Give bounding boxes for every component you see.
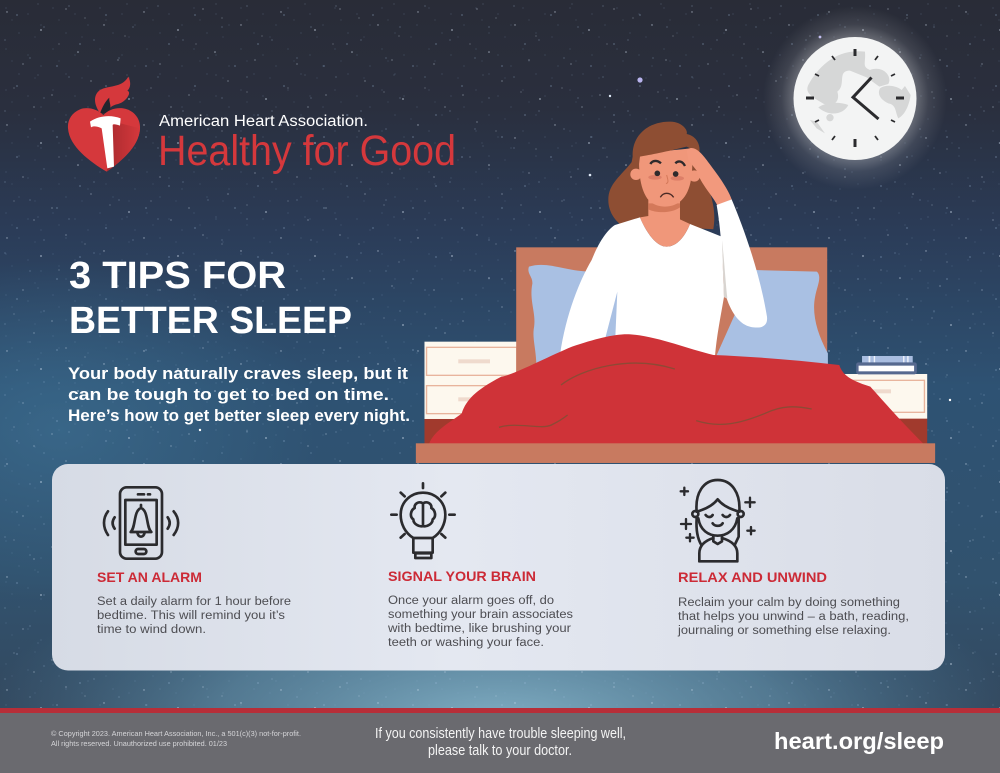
icon: heart and torch	[68, 77, 140, 172]
hair back	[608, 147, 714, 229]
description: bedtime. This will remind you it’s	[97, 610, 285, 622]
description	[677, 597, 909, 637]
doctor advice: If you consistently have trouble sleeping well,	[375, 725, 626, 742]
description: Once your alarm goes off, do	[388, 595, 554, 607]
sleeve shadow	[722, 240, 727, 298]
description: Reclaim your calm by doing something	[678, 597, 900, 609]
intro text: Here’s how to get better sleep every night.	[68, 406, 410, 425]
description: Set a daily alarm for 1 hour before	[97, 596, 291, 608]
description: that helps you unwind – a bath, reading,	[678, 611, 909, 623]
shirt body	[560, 217, 724, 357]
neck shadow	[648, 203, 680, 212]
tip 1: set an alarm	[97, 487, 291, 636]
left nightstand	[424, 342, 517, 419]
blanket wrinkles	[499, 363, 812, 427]
bed frame shadow	[424, 418, 927, 445]
pillow gap beside arm	[605, 292, 617, 339]
description	[387, 595, 573, 649]
facial features	[648, 161, 685, 197]
intro text: Your body naturally craves sleep, but it	[68, 364, 408, 383]
description	[97, 596, 291, 636]
icon: light bulb with brain	[391, 483, 455, 558]
intro text	[68, 364, 410, 425]
title: 3 TIPS FOR	[69, 255, 286, 297]
raised arm sleeve	[717, 199, 767, 328]
moon clock	[763, 6, 947, 190]
intro text: can be tough to get to bed on time.	[68, 385, 389, 404]
clock hands	[853, 78, 878, 119]
tip 2: signal your brain	[387, 483, 573, 649]
heading: SET AN ALARM	[97, 569, 202, 585]
copyright: © Copyright 2023. American Heart Association, Inc., a 501(c)(3) not-for-profit.	[51, 729, 301, 738]
website: heart.org/sleep	[774, 728, 944, 754]
woman sitting up in bed, holding her head	[560, 122, 767, 357]
ears	[630, 169, 700, 182]
organisation name: American Heart Association.	[159, 113, 368, 130]
right nightstand	[841, 374, 927, 419]
icon: calm woman with sparkles	[681, 480, 755, 561]
Healthy for Good wordmark: Healthy for Good	[158, 127, 456, 175]
face	[639, 148, 692, 207]
neck and chest	[640, 200, 690, 247]
doctor advice: please talk to your doctor.	[428, 742, 572, 759]
nightstands and bed	[424, 247, 927, 445]
description: time to wind down.	[97, 624, 206, 636]
heading: SIGNAL YOUR BRAIN	[388, 568, 536, 584]
logo: American Heart Association Healthy for Good	[68, 77, 456, 175]
stack of books	[856, 356, 917, 374]
bed base	[416, 443, 935, 463]
moon craters	[807, 51, 911, 133]
panel: three tips	[52, 464, 945, 670]
right pillow	[710, 270, 828, 370]
title: BETTER SLEEP	[69, 300, 352, 342]
copyright: All rights reserved. Unauthorized use prohibited. 01/23	[51, 739, 227, 748]
description: with bedtime, like brushing your	[387, 623, 571, 635]
red blanket	[429, 334, 924, 444]
headboard	[516, 247, 827, 381]
description: journaling or something else relaxing.	[677, 625, 891, 637]
left pillow	[528, 265, 593, 377]
footer	[0, 708, 1000, 773]
hair top	[631, 122, 700, 169]
copyright	[51, 729, 301, 748]
hand on forehead	[687, 148, 732, 205]
blanket and bed base	[416, 334, 935, 463]
heading: RELAX AND UNWIND	[678, 569, 827, 585]
title	[69, 255, 352, 342]
tip 3: relax and unwind	[677, 480, 909, 637]
clock ticks	[806, 49, 904, 147]
icon: phone with bell	[104, 487, 178, 559]
moon face	[794, 37, 916, 160]
doctor advice	[375, 725, 626, 759]
description: something your brain associates	[388, 609, 573, 621]
description: teeth or washing your face.	[388, 637, 544, 649]
